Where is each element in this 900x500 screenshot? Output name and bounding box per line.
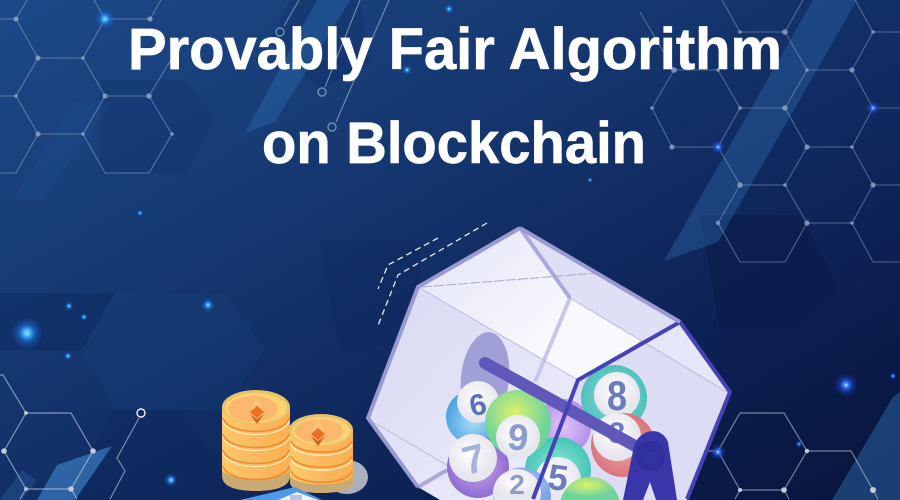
hexagon network: bottom right [700, 413, 878, 499]
purple ball [535, 399, 591, 455]
title: on Blockchain [262, 111, 646, 176]
title [128, 17, 782, 176]
ball 9 [485, 390, 551, 459]
ball 8 [581, 365, 647, 431]
ball 5 [525, 437, 591, 500]
large coin stack [222, 390, 290, 491]
cage front outline [533, 322, 730, 499]
ball 6: 6 [467, 388, 490, 423]
axle rod [485, 363, 637, 447]
cage stand [623, 431, 677, 500]
ball 7: 7 [458, 436, 490, 484]
icon: stacked ethereum coins [222, 390, 368, 494]
ball 3: 3 [609, 417, 625, 450]
ball 3 [591, 413, 655, 477]
circuit lines with ring nodes [110, 0, 389, 499]
ball 7 [447, 434, 509, 498]
ball 9: 9 [506, 416, 530, 459]
inner cage struts [375, 228, 727, 487]
title: Provably Fair Algorithm [128, 17, 782, 82]
cage back outline [368, 228, 680, 487]
ball 6 [446, 381, 500, 444]
ball 5: 5 [545, 456, 571, 499]
hexagon network: top right [640, 0, 900, 262]
green ball [561, 477, 619, 500]
hexagon network: top left [0, 0, 174, 173]
ball 2: 2 [509, 469, 525, 500]
small coin stack [289, 414, 353, 493]
icon: ethereum logo [311, 419, 325, 446]
dashed motion lines [377, 223, 487, 328]
icon: ethereum logo [250, 397, 264, 424]
blue card at bottom [240, 487, 322, 500]
ball 2 [493, 468, 551, 500]
hexagon network: bottom left [0, 375, 96, 499]
cage faces [368, 228, 730, 500]
lottery cage [368, 228, 730, 500]
ball 8: 8 [607, 372, 627, 419]
axle hole [456, 330, 514, 426]
coin shadow [326, 460, 368, 494]
balls [446, 365, 655, 500]
